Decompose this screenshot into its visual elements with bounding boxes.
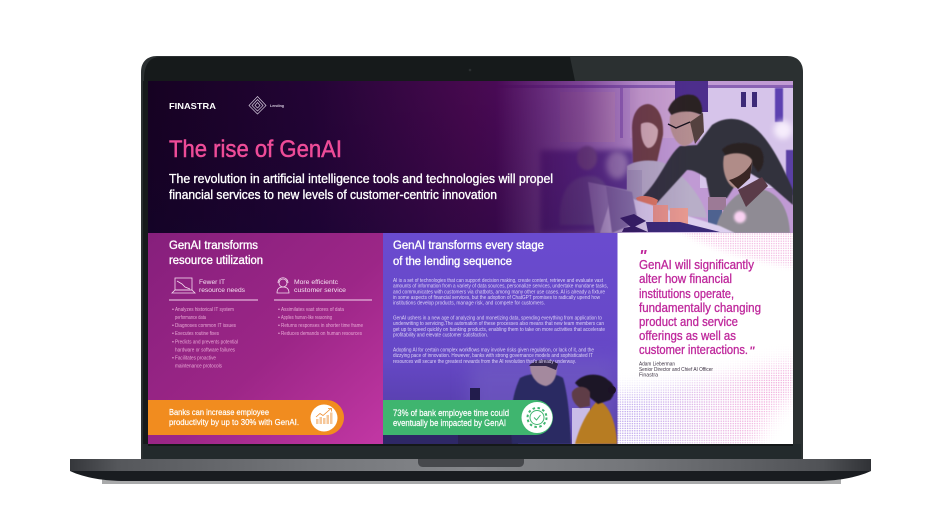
quote text: fundamentally changing (639, 301, 761, 315)
mid photo: two colleagues at a computer (383, 360, 617, 444)
list: customer service bullets (278, 307, 363, 337)
quote text (639, 258, 761, 357)
body text: what AI is: and communicates with customers via chatbots, among many other use cases. AI is already a fixture (393, 289, 605, 295)
heading: lending sequence: GenAI transforms every stage (393, 240, 544, 252)
heading: resource utilization (169, 240, 263, 267)
heading: lending sequence: of the lending sequence (393, 256, 512, 268)
laptop mockup with infographic (70, 56, 871, 484)
attribution: Finastra (639, 372, 658, 378)
body text: adopting AI (393, 348, 594, 365)
logo: Finastra: FINASTRA (169, 101, 216, 111)
body text: adopting AI: Adopting AI for certain complex workflows may involve risks given regulation, or lack of it, and the (393, 348, 594, 354)
subheading: customer service: More efficientc (294, 279, 339, 286)
panel: lending sequence (383, 233, 618, 444)
list: IT resource bullets: • (172, 356, 174, 362)
subtitle (169, 171, 553, 202)
list: customer service bullets: • (278, 331, 280, 337)
header photo: team around a laptop (480, 81, 794, 233)
list: IT resource bullets: • (172, 340, 174, 346)
subheading: customer service: customer service (294, 287, 346, 294)
dividers (169, 300, 372, 301)
body text: what AI is: amounts of information from a variety of data sources, personalize services, undertake mundane tasks, (393, 284, 608, 290)
subtitle: The revolution in artificial intelligence tools and technologies will propel (169, 171, 553, 186)
icon: rising bar chart (310, 404, 338, 432)
subheading: fewer IT resource needs: resource needs (199, 287, 246, 294)
quote mark: opening: " (639, 248, 647, 265)
body text: what AI is: institutions develop products, manage risk, and compete for customers. (393, 301, 545, 307)
body text: what AI is: in some aspects of financial services, but the adoption of ChatGPT promises to radically upend how (393, 295, 600, 301)
logo: Lending diamond (249, 96, 266, 114)
list: IT resource bullets: Executes routine fixes (175, 331, 219, 337)
laptop lid (141, 56, 803, 459)
attribution (639, 362, 713, 378)
list: IT resource bullets: Analyzes historical IT system (175, 307, 234, 313)
callout text: employee time: 73% of bank employee time could (393, 408, 509, 418)
list: customer service bullets: • (278, 323, 280, 329)
subtitle: financial services to new levels of customer-centric innovation (169, 187, 497, 202)
body text: what AI is: AI is a set of technologies that can support decision making, create content, retrieve and evaluate vast (393, 278, 604, 284)
subheading: fewer IT resource needs: Fewer IT (199, 279, 225, 286)
subheading: customer service (294, 279, 346, 294)
quote text: institutions operate, (639, 287, 734, 301)
icon: customer service headset (277, 278, 289, 293)
quote text: offerings as well as (639, 329, 736, 343)
quote mark: closing: " (749, 344, 755, 358)
list: customer service bullets: Returns responses in shorter time frame (281, 323, 363, 329)
desk, laptop and blocks (600, 198, 734, 233)
list: IT resource bullets: hardware or software failures (175, 348, 235, 354)
quote text: product and service (639, 315, 738, 329)
screen: infographic (148, 81, 794, 444)
laptop base (70, 459, 871, 484)
list: IT resource bullets: Diagnoses common IT issues (175, 323, 236, 329)
body text: GenAI ushers: GenAI ushers in a new age of analyzing and monetizing data, spending everything from application to (393, 316, 602, 322)
panel: header banner (148, 81, 794, 233)
callout text: productivity: Banks can increase employee (169, 407, 269, 417)
clothes under main man (708, 197, 726, 210)
callout text: employee time: eventually be impacted by GenAI (393, 418, 506, 428)
body text: GenAI ushers: get up to speed quickly on banking products, enabling them to take on more activities that accelerate (393, 327, 605, 333)
callout text: employee time (393, 408, 509, 428)
body text: GenAI ushers: profitability and elevate customer satisfaction. (393, 333, 488, 339)
quote text: GenAI will significantly (639, 258, 755, 272)
heading: resource utilization: resource utilization (169, 255, 263, 267)
list: customer service bullets: Assimilates vast stores of data (281, 307, 345, 313)
list: IT resource bullets: Predicts and prevents potential (175, 340, 238, 346)
attribution: Adam Lieberman (639, 362, 675, 368)
body text: adopting AI: dizzying pace of innovation. However, banks with strong governance models and sophisticated IT (393, 353, 593, 359)
logo label: Lending: Lending (270, 104, 284, 108)
callout text: productivity (169, 407, 299, 427)
callout: productivity (148, 400, 344, 435)
quote text: alter how financial (639, 272, 732, 286)
list: IT resource bullets: • (172, 307, 174, 313)
list: customer service bullets: • (278, 315, 280, 321)
list: customer service bullets: Reduces demands on human resources (281, 331, 362, 337)
callout: employee time (383, 400, 553, 435)
attribution: Senior Director and Chief AI Officer (639, 367, 713, 373)
body text: what AI is (393, 278, 608, 307)
main man (643, 119, 793, 205)
list: IT resource bullets: performance data (175, 315, 207, 321)
list: IT resource bullets: maintenance protocols (175, 364, 222, 370)
quote text: customer interactions. (639, 343, 748, 357)
icon: gear with check (522, 402, 552, 433)
heading: resource utilization: GenAI transforms (169, 240, 258, 252)
body text: GenAI ushers: underwriting to servicing.The automation of these processes also means that new team members can (393, 321, 604, 327)
list: customer service bullets: • (278, 307, 280, 313)
icon: laptop with falling chart (172, 278, 195, 293)
list: IT resource bullets: • (172, 323, 174, 329)
list: IT resource bullets (172, 307, 238, 370)
callout text: productivity: productivity by up to 30% with GenAI. (169, 417, 299, 427)
subheading: fewer IT resource needs (199, 279, 246, 294)
title: The rise of GenAI (169, 136, 342, 163)
heading: lending sequence (393, 240, 544, 268)
panel: quote (617, 233, 793, 444)
list: customer service bullets: Applies human-like reasoning (281, 315, 332, 321)
list: IT resource bullets: • (172, 331, 174, 337)
seated man (715, 188, 790, 233)
woman (632, 104, 663, 163)
panel: resource utilization (148, 233, 383, 444)
body text: GenAI ushers (393, 316, 605, 339)
list: IT resource bullets: Facilitates proactive (175, 356, 216, 362)
body text: adopting AI: resources will secure the greatest rewards from the AI revolution that's already underway. (393, 359, 576, 365)
